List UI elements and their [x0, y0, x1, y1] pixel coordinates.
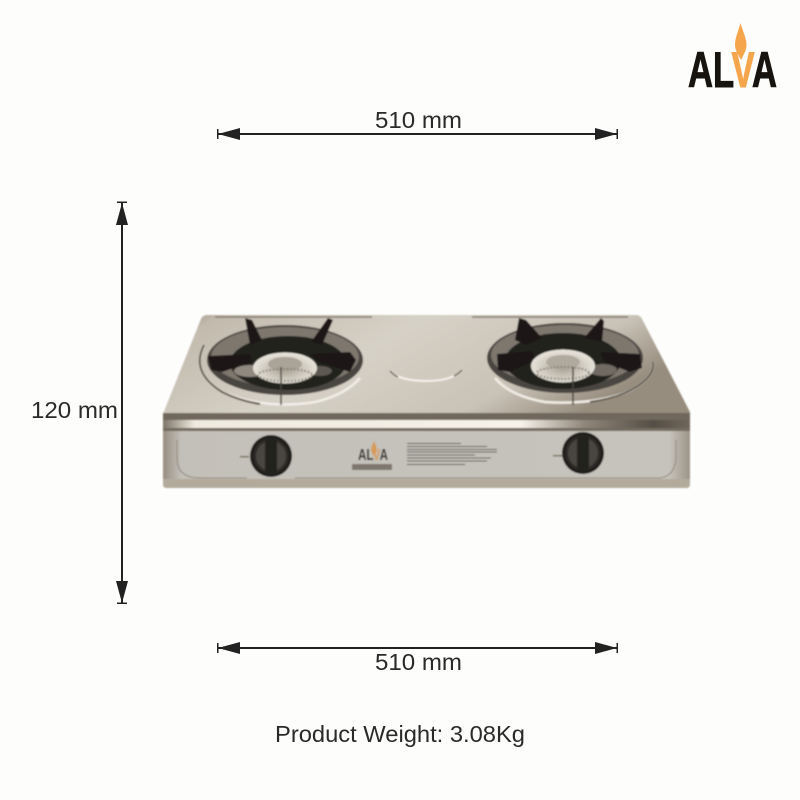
- logo wordmark: ALVA: [688, 42, 777, 98]
- recess ring: [495, 362, 653, 403]
- panel label: instructions: [407, 443, 497, 465]
- arrow: height: [116, 202, 128, 604]
- arrow: bottom width: [217, 642, 618, 654]
- burner bowl: [487, 323, 643, 393]
- right control knob: [553, 432, 604, 474]
- photo: two-burner gas stove: [163, 315, 690, 488]
- front panel recess: [177, 440, 676, 478]
- icon: flame: [735, 23, 746, 60]
- recess ring: [200, 345, 360, 404]
- left burner: [200, 318, 363, 405]
- pan supports: [208, 318, 356, 372]
- front lip: [163, 413, 690, 432]
- label: top width: 510 mm: [375, 107, 462, 133]
- label: height: 120 mm: [31, 397, 118, 423]
- left control knob: [240, 435, 292, 477]
- product weight: Product Weight: 3.08Kg: [275, 721, 525, 747]
- burner bowl: [207, 325, 363, 395]
- right burner: [487, 318, 653, 405]
- stove top plate: [163, 315, 690, 419]
- top width dimension: [217, 107, 618, 140]
- height dimension: [31, 202, 128, 604]
- front panel: [163, 431, 690, 488]
- top plate rear edge: [215, 316, 628, 318]
- centre dent: [390, 370, 462, 381]
- arrow: top width: [217, 128, 618, 140]
- label: bottom width: 510 mm: [375, 649, 462, 675]
- burner head: [531, 350, 595, 382]
- burner head: [253, 352, 317, 384]
- pan supports: [497, 318, 642, 372]
- panel label: logo: [352, 441, 392, 470]
- brand logo: [688, 23, 777, 98]
- bottom width dimension: [217, 642, 618, 675]
- panel label: logo: ALVA: [358, 447, 388, 464]
